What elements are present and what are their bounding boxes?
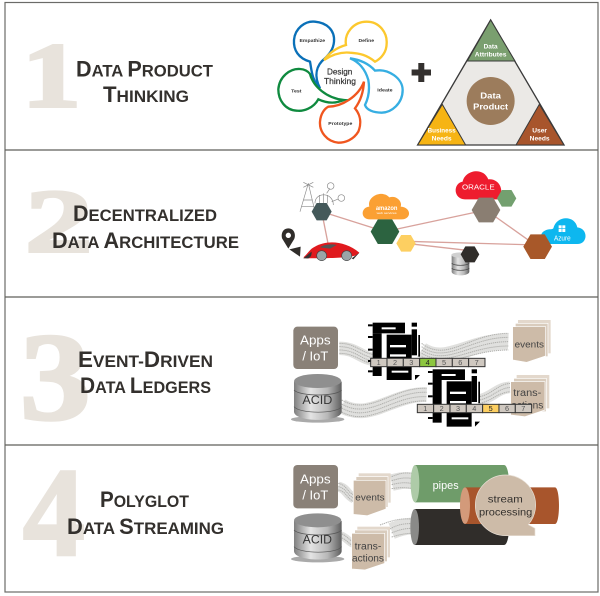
- numeral 4: 4: [23, 443, 85, 582]
- documents: transactions: [352, 527, 390, 570]
- heading: data product thinking: THINKING: [103, 82, 189, 107]
- ledger diagram: [291, 320, 551, 427]
- pipe: green: pipes: [433, 480, 459, 492]
- node hexagons: [312, 190, 552, 259]
- heading: event-driven data ledgers: EVENT-DRIVEN: [78, 347, 213, 372]
- box: apps / iot: / IoT: [302, 350, 329, 364]
- heading: decentralized data architecture: DECENTRALIZED: [73, 201, 217, 226]
- segment: business needs: Needs: [432, 137, 452, 143]
- streaming diagram: [291, 465, 559, 570]
- documents: transactions: actions: [352, 553, 384, 564]
- pipe: green: [411, 465, 509, 502]
- heading: polyglot data streaming: POLYGLOT: [100, 487, 190, 512]
- icon: database: [451, 252, 469, 275]
- heading: event-driven data ledgers: DATA LEDGERS: [80, 373, 211, 398]
- numeral 3: 3: [20, 307, 91, 446]
- box: apps / iot: Apps: [300, 472, 331, 486]
- hexagon: database node: [461, 246, 479, 262]
- segment: business needs: Business: [428, 128, 456, 134]
- ledger row 1: 1: [377, 358, 381, 367]
- label: design thinking: Design: [327, 68, 352, 77]
- pipe: orange: [460, 487, 559, 524]
- label: design thinking: [324, 68, 356, 86]
- heading: data product thinking: DATA PRODUCT: [76, 56, 214, 82]
- segment: user needs: Needs: [530, 137, 550, 143]
- documents: transactions: trans-: [513, 388, 541, 399]
- box: apps / iot: Apps: [300, 333, 331, 347]
- heading: data product thinking: [76, 56, 214, 107]
- label: design thinking: Thinking: [324, 77, 356, 86]
- bubble: stream processing: [475, 475, 536, 536]
- documents: transactions: [511, 375, 549, 417]
- cloud: azure: [541, 218, 586, 244]
- heading: polyglot data streaming: [67, 487, 224, 539]
- database: acid: ACID: [302, 393, 333, 407]
- bubble: stream processing: processing: [479, 508, 532, 519]
- heading: decentralized data architecture: [52, 201, 239, 253]
- database: acid: [291, 513, 344, 562]
- segment: user needs: [516, 104, 564, 145]
- panel 2: decentralized data architecture: [25, 171, 586, 275]
- icon: ledger log 1: [368, 323, 420, 380]
- documents: events: events: [515, 340, 545, 350]
- circle: data product: [467, 77, 515, 125]
- cloud: azure: Azure: [554, 235, 571, 242]
- database: acid: [291, 374, 344, 423]
- ledger row 2: 3: [456, 404, 460, 413]
- bubble: empathize: Empathize: [299, 38, 326, 43]
- box: apps / iot: [293, 465, 338, 508]
- documents: events: [513, 320, 551, 362]
- cloud: oracle: ORACLE: [462, 183, 495, 192]
- bubble: ideate: Ideate: [377, 88, 393, 93]
- bubble: define: Define: [358, 38, 375, 43]
- connection lines: [322, 210, 538, 251]
- box: apps / iot: / IoT: [302, 489, 329, 503]
- network diagram: [282, 171, 586, 275]
- bubble: stream processing: stream: [488, 495, 523, 506]
- ledger row 1: 5: [442, 358, 446, 367]
- icon: location pin and arrow: [282, 228, 301, 257]
- ledger row 2: 1: [423, 404, 427, 413]
- numeral 1: 1: [22, 25, 81, 127]
- ledger row 1: 3: [409, 358, 413, 367]
- pipe: black: [410, 509, 509, 545]
- ledger row 1: 4: [426, 358, 430, 367]
- segment: user needs: User: [532, 128, 548, 134]
- cloud: amazon web services: [363, 194, 409, 219]
- database: acid: ACID: [303, 532, 332, 546]
- documents: events: [353, 473, 391, 516]
- cloud: oracle: [456, 171, 501, 199]
- ledger row 1: 7: [475, 358, 479, 367]
- cloud: amazon web services: web services: [377, 211, 397, 215]
- icon: red car: [303, 242, 359, 261]
- data product triangle: [418, 20, 564, 145]
- data streams: [338, 473, 412, 546]
- documents: transactions: trans-: [355, 541, 381, 552]
- bubble: prototype: Prototype: [328, 121, 353, 126]
- ledger row 2: 4: [472, 404, 476, 413]
- heading: decentralized data architecture: DATA ARCHITECTURE: [52, 228, 239, 253]
- ledger row 2: 6: [505, 404, 509, 413]
- cloud: amazon web services: amazon: [376, 206, 398, 212]
- bubble: test: Test: [291, 89, 302, 94]
- ledger row 2: 7: [521, 404, 525, 413]
- documents: transactions: actions: [511, 400, 543, 411]
- ledger row 1: [371, 358, 485, 367]
- icon: ledger log 2: [428, 369, 480, 427]
- documents: events: events: [355, 492, 385, 502]
- data streams: [339, 333, 510, 417]
- icon: tower and sensors: [300, 182, 345, 212]
- segment: data attributes: Attributes: [475, 53, 507, 59]
- ledger row 2: 2: [440, 404, 444, 413]
- panel 1: data product thinking: [22, 20, 564, 145]
- box: apps / iot: [293, 327, 338, 369]
- segment: data attributes: Data: [484, 44, 498, 50]
- segment: business needs: [418, 104, 466, 145]
- segment: data attributes: [467, 20, 515, 61]
- panel 3: event-driven data ledgers: [20, 307, 551, 446]
- ledger row 2: 5: [489, 404, 493, 413]
- numeral 2: 2: [25, 171, 92, 271]
- ledger row 1: 2: [393, 358, 397, 367]
- panel 4: polyglot data streaming: [23, 443, 559, 582]
- heading: polyglot data streaming: DATA STREAMING: [67, 514, 224, 539]
- heading: event-driven data ledgers: [78, 347, 213, 398]
- circle: data product: Data: [480, 90, 501, 100]
- ledger row 2: [417, 404, 532, 413]
- design thinking diagram: [278, 22, 403, 143]
- ledger row 1: 6: [458, 358, 462, 367]
- circle: data product: Product: [473, 101, 508, 111]
- icon: plus sign: [412, 63, 431, 82]
